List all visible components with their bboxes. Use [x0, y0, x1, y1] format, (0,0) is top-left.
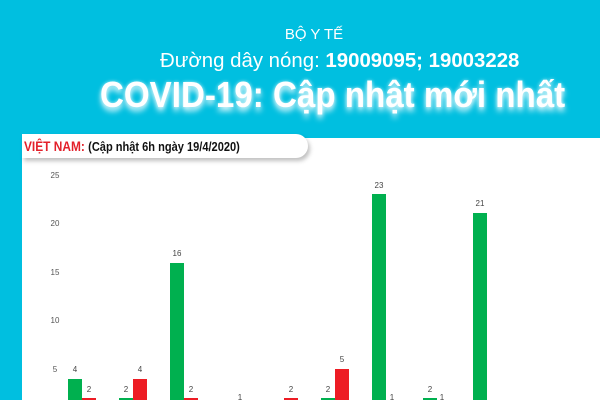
y axis labels: 5	[53, 365, 58, 374]
header: ministry: BỘ Y TẾ	[285, 26, 343, 43]
y axis labels: 25	[51, 171, 60, 180]
bar value labels: 21	[476, 199, 485, 208]
bar value labels: 2	[124, 385, 129, 394]
panel: chart area	[22, 138, 600, 400]
bar value labels: 2	[189, 385, 194, 394]
y axis labels: 10	[51, 316, 60, 325]
y axis labels: 15	[51, 268, 60, 277]
bar value labels: 2	[289, 385, 294, 394]
bar value labels: 2	[326, 385, 331, 394]
bars	[68, 194, 487, 400]
bar value labels: 16	[173, 249, 182, 258]
y axis labels: 20	[51, 219, 60, 228]
header: hotline: Đường dây nóng: 19009095; 19003228	[160, 50, 519, 72]
bar value labels: 4	[138, 365, 143, 374]
title: COVID-19: Cập nhật mới nhất	[100, 74, 565, 115]
bar value labels: 5	[340, 355, 345, 364]
bar value labels: 2	[87, 385, 92, 394]
bar value labels: 2	[428, 385, 433, 394]
label: Viet Nam update: VIỆT NAM: (Cập nhật 6h ngày 19/4/2020)	[24, 138, 240, 154]
bar value labels: 23	[375, 181, 384, 190]
y axis labels	[51, 171, 60, 374]
bar value labels	[73, 181, 485, 400]
label: Viet Nam update	[22, 134, 308, 158]
bar value labels: 4	[73, 365, 78, 374]
